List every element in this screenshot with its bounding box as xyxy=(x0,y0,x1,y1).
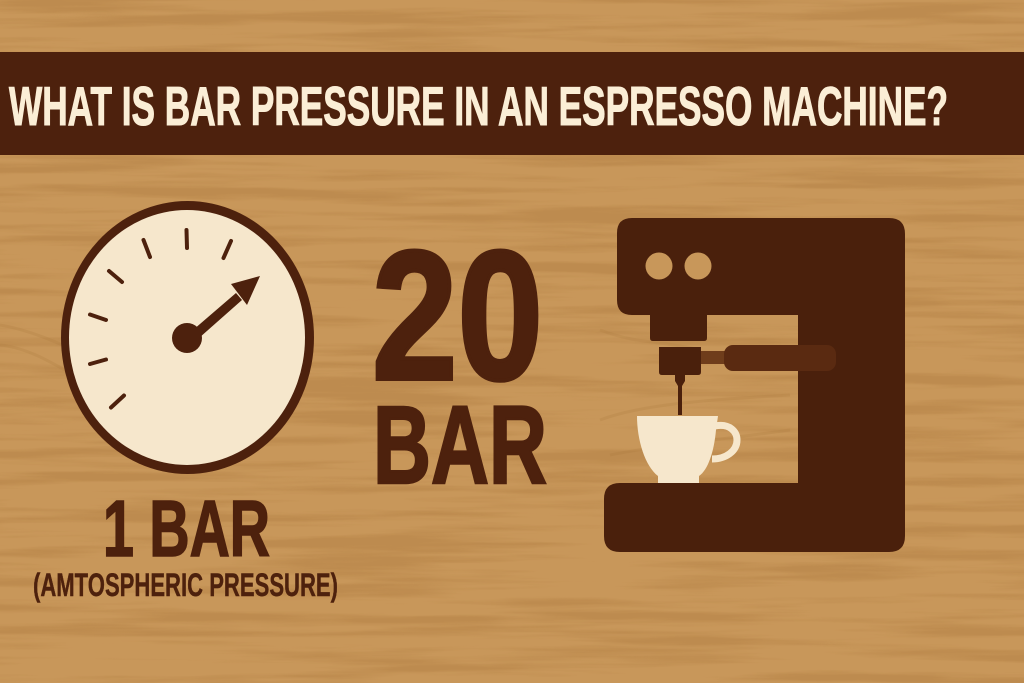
title banner xyxy=(0,52,1024,155)
big number: 20 bar: 20 xyxy=(372,212,543,418)
machine buttons xyxy=(646,252,712,280)
portafilter head and coffee stream xyxy=(659,347,701,415)
big number: 20 bar: BAR xyxy=(373,384,547,507)
label: atmospheric pressure: (AMTOSPHERIC PRESSURE) xyxy=(33,567,338,603)
portafilter handle xyxy=(701,345,836,371)
machine body xyxy=(604,218,905,552)
big number: 20 bar xyxy=(372,212,547,507)
icon: pressure gauge xyxy=(61,201,314,474)
gauge needle xyxy=(172,276,260,353)
icon: coffee cup xyxy=(637,416,737,483)
label: 1 bar: 1 BAR xyxy=(103,484,270,573)
icon: espresso machine xyxy=(604,218,905,552)
